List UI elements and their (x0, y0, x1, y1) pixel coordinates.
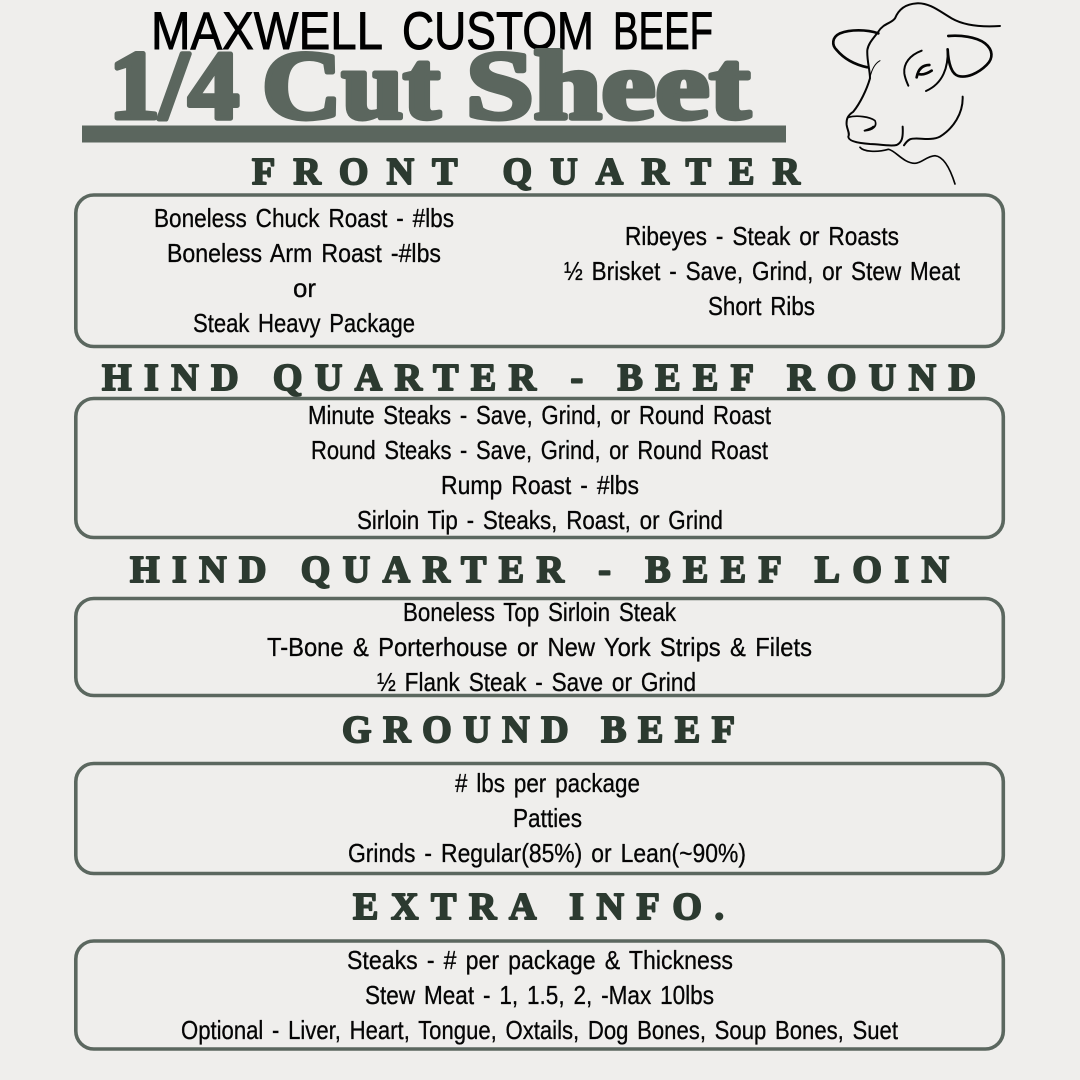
panel: front quarter cuts: Steak Heavy Package (193, 308, 415, 338)
panel: beef round cuts: Rump Roast - #lbs (441, 470, 639, 500)
panel: beef round cuts: Sirloin Tip - Steaks, Roast, or Grind (357, 505, 723, 535)
panel: front quarter cuts: Short Ribs (708, 291, 815, 321)
heading: Extra Info: EXTRA INFO. (353, 886, 724, 928)
panel: front quarter cuts (76, 195, 1003, 346)
panel: front quarter cuts: ½ Brisket - Save, Grind, or Stew Meat (564, 256, 961, 286)
panel: extra info: Stew Meat - 1, 1.5, 2, -Max 10lbs (365, 980, 714, 1010)
panel: extra info (76, 941, 1003, 1049)
panel: front quarter cuts: Boneless Arm Roast -#lbs (167, 238, 441, 268)
title: Maxwell Custom Beef: CUSTOM (402, 2, 594, 61)
title: 1/4 Cut Sheet: Cut (262, 32, 440, 140)
panel: ground beef options: Grinds - Regular(85%) or Lean(~90%) (348, 838, 746, 868)
panel: front quarter cuts: Ribeyes - Steak or Roasts (625, 221, 899, 251)
panel: front quarter cuts: or (293, 273, 316, 303)
panel: beef loin cuts: T-Bone & Porterhouse or New York Strips & Filets (267, 632, 812, 662)
title: 1/4 Cut Sheet: 1/4 (109, 32, 239, 140)
icon: cow head line drawing (833, 3, 1000, 184)
panel: beef loin cuts: ½ Flank Steak - Save or Grind (377, 667, 696, 697)
title: Maxwell Custom Beef (151, 2, 713, 61)
panel: beef loin cuts: Boneless Top Sirloin Steak (403, 597, 677, 627)
title: Maxwell Custom Beef: BEEF (613, 2, 713, 61)
panel: ground beef options: # lbs per package (455, 768, 640, 798)
title: Maxwell Custom Beef: MAXWELL (151, 2, 383, 61)
panel: ground beef options: Patties (513, 803, 582, 833)
panel: ground beef options (76, 764, 1003, 874)
panel: extra info: Optional - Liver, Heart, Tongue, Oxtails, Dog Bones, Soup Bones, Suet (181, 1015, 899, 1045)
heading: Hind Quarter - Beef Round: HIND QUARTER - BEEF ROUND (102, 357, 976, 399)
title underline bar (82, 126, 786, 142)
panel: beef loin cuts (76, 597, 1003, 697)
heading: Hind Quarter - Beef Loin: HIND QUARTER - BEEF LOIN (130, 549, 949, 591)
title: 1/4 Cut Sheet: Sheet (466, 32, 750, 140)
panel: extra info: Steaks - # per package & Thickness (347, 945, 733, 975)
panel: front quarter cuts: Boneless Chuck Roast - #lbs (154, 203, 454, 233)
panel: beef round cuts: Minute Steaks - Save, Grind, or Round Roast (308, 400, 772, 430)
title: 1/4 Cut Sheet (109, 32, 750, 140)
heading: Front Quarter: FRONT QUARTER (252, 151, 801, 193)
panel: beef round cuts: Round Steaks - Save, Grind, or Round Roast (311, 435, 769, 465)
panel: beef round cuts (76, 398, 1003, 538)
heading: Ground Beef: GROUND BEEF (342, 709, 735, 751)
